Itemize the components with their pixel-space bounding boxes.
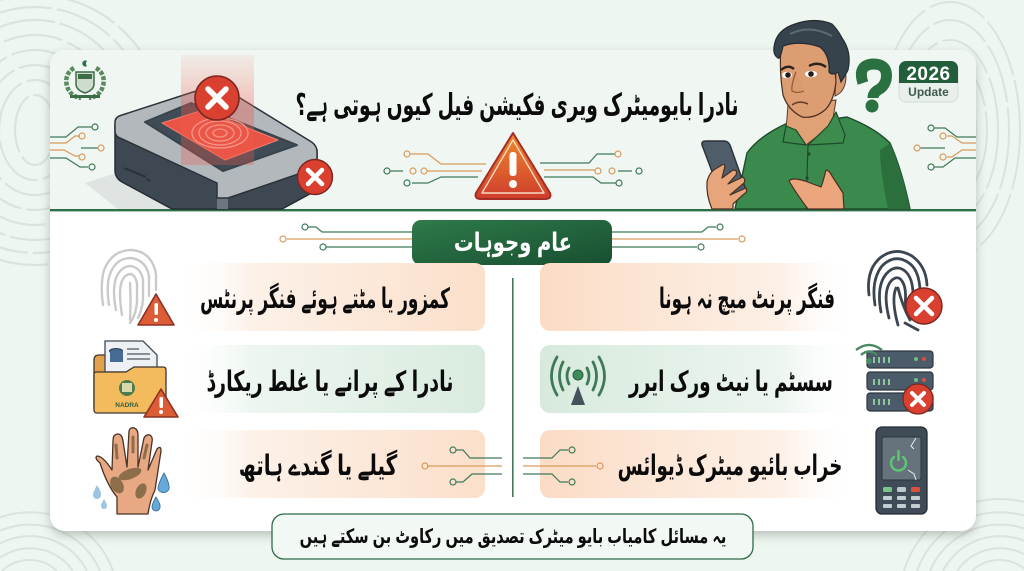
icon: fingerprint with error bbox=[868, 251, 942, 330]
row: faulty device: خراب بائیو میٹرک ڈیوائس bbox=[618, 451, 842, 482]
icon: error badge on side bbox=[298, 160, 332, 194]
row: wet or dirty hands bbox=[175, 430, 485, 498]
row: system or network error bbox=[540, 345, 860, 413]
hair bbox=[774, 20, 849, 82]
badge: 2026 update: Update bbox=[908, 85, 949, 99]
face bbox=[780, 40, 836, 117]
circuit lines: left row end bbox=[422, 447, 502, 485]
row: fingerprint mismatch bbox=[540, 263, 860, 331]
main card bbox=[50, 50, 976, 531]
icon: dirty wet hand bbox=[93, 428, 169, 514]
icon: question mark bbox=[861, 64, 886, 112]
nose and mouth bbox=[792, 72, 804, 92]
row: outdated records bbox=[175, 345, 485, 413]
illustration: worried man with phone bbox=[702, 20, 910, 209]
background fingerprint: bottom corners bbox=[0, 499, 1024, 571]
row: weak fingerprints bbox=[175, 263, 485, 331]
circuit lines: beside warning bbox=[384, 151, 642, 186]
row: system or network error: سسٹم یا نیٹ ورک ایرر bbox=[628, 367, 833, 398]
phone bbox=[702, 141, 746, 198]
icon: antenna signal bbox=[552, 357, 604, 405]
row: outdated records: نادرا کے پرانے یا غلط ریکارڈ bbox=[207, 366, 453, 398]
row: fingerprint mismatch: فنگر پرنٹ میچ نہ ہونا bbox=[659, 283, 835, 315]
right hand bbox=[789, 170, 844, 209]
icon: national emblem bbox=[66, 61, 104, 98]
ear bbox=[835, 70, 846, 96]
circuit lines: header right bbox=[914, 125, 976, 170]
badge: 2026 update bbox=[899, 61, 958, 102]
icon: server with wifi and error bbox=[856, 345, 933, 414]
shirt bbox=[735, 117, 910, 209]
background fingerprint: right bbox=[880, 2, 1020, 258]
neck bbox=[786, 100, 836, 145]
center divider bbox=[512, 278, 514, 497]
circuit lines: right row start bbox=[523, 447, 603, 485]
icon: NADRA folder with warning: NADRA bbox=[115, 402, 139, 409]
background fingerprint: left bbox=[0, 0, 165, 265]
icon: faded fingerprint with warning bbox=[102, 250, 174, 325]
footer note pill: یہ مسائل کامیاب بایو میٹرک تصدیق میں رکاوٹ بن سکتے ہیں bbox=[300, 525, 726, 549]
circuit lines: around section heading bbox=[280, 224, 745, 250]
icon: broken handheld device bbox=[876, 427, 927, 514]
circuit lines: header left bbox=[50, 124, 104, 170]
illustration: biometric scanner bbox=[85, 55, 332, 209]
fingerprint on pad bbox=[192, 118, 248, 148]
eyes bbox=[782, 72, 792, 78]
footer note pill bbox=[272, 514, 753, 559]
left hand bbox=[707, 164, 747, 209]
header panel bbox=[50, 50, 976, 211]
badge: 2026 update: 2026 bbox=[906, 64, 951, 85]
section heading pill: عام وجوہات bbox=[454, 227, 572, 258]
brows bbox=[781, 64, 826, 70]
icon: NADRA folder with warning bbox=[94, 341, 178, 417]
row: faulty device bbox=[540, 430, 860, 498]
section heading pill bbox=[412, 220, 612, 265]
title: نادرا بایومیٹرک ویری فکیشن فیل کیوں ہوتی ہے؟ bbox=[295, 89, 739, 123]
icon: warning triangle bbox=[476, 133, 550, 199]
row: weak fingerprints: کمزور یا مٹتے ہوئے فنگر پرنٹس bbox=[200, 283, 450, 315]
icon: error badge on scanner bbox=[195, 76, 239, 120]
collar bbox=[783, 112, 845, 145]
row: wet or dirty hands: گیلے یا گندے ہاتھ bbox=[239, 449, 398, 482]
